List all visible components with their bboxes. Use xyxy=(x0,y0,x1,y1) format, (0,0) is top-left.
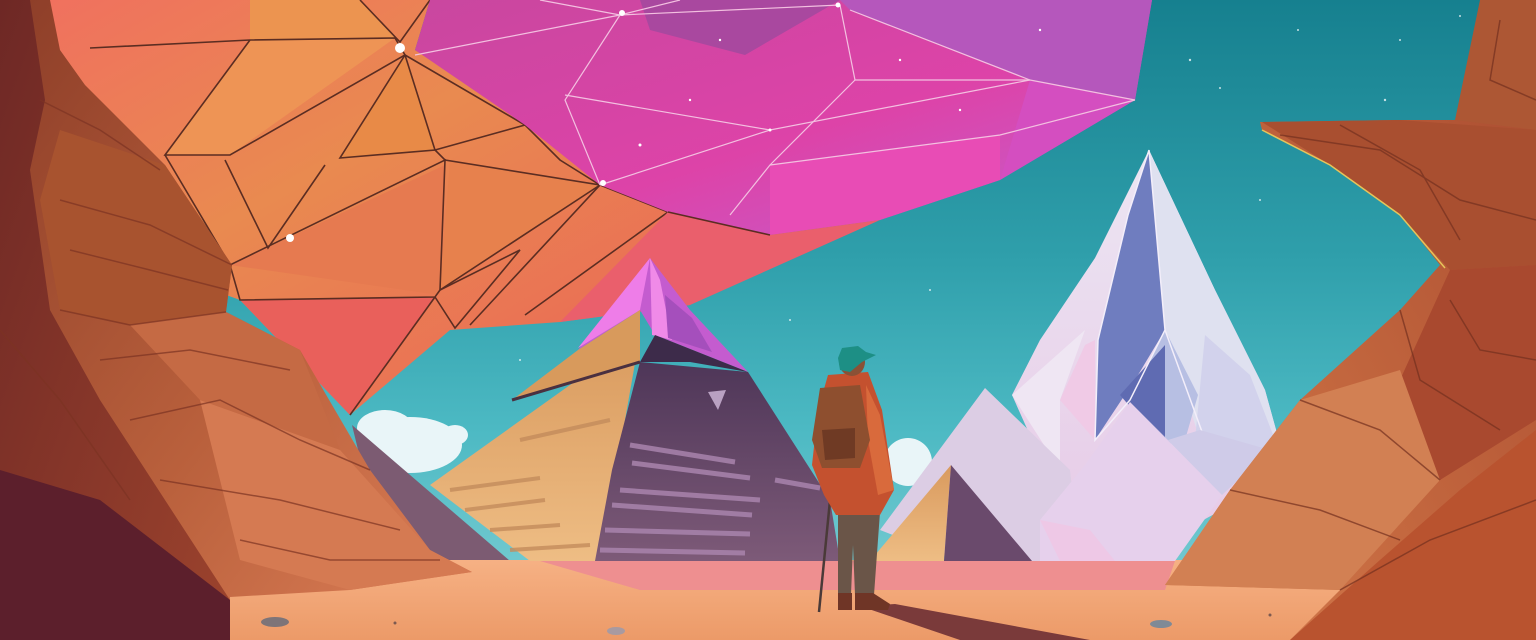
distant left pyramid xyxy=(352,425,510,561)
stars xyxy=(519,15,1461,361)
legs xyxy=(838,512,880,595)
boots xyxy=(838,593,890,610)
lower crystal pyramid xyxy=(1040,402,1270,561)
big pyramid xyxy=(430,258,840,561)
hiker figure xyxy=(812,346,894,612)
pebbles xyxy=(261,614,1272,635)
jacket xyxy=(812,372,894,515)
white pyramid small xyxy=(880,388,1080,561)
small tan pyramid xyxy=(870,465,1032,561)
coral zone under magenta facet xyxy=(560,212,880,322)
hiker shadow xyxy=(860,604,1090,640)
head xyxy=(839,348,865,376)
clouds xyxy=(357,410,932,486)
floating magenta facet xyxy=(286,0,1152,322)
walking stick xyxy=(819,480,832,612)
magenta facet lines xyxy=(415,0,1135,215)
vertices and sparkles xyxy=(286,2,1041,242)
large white crystal xyxy=(1012,150,1283,560)
left canyon rock wall xyxy=(0,0,472,640)
backpack xyxy=(812,385,870,468)
right canyon rock wall xyxy=(1165,0,1536,640)
teal cap xyxy=(838,346,876,372)
floating orange facet xyxy=(30,0,770,415)
facet lines xyxy=(90,0,668,415)
sand ground xyxy=(0,560,1536,640)
